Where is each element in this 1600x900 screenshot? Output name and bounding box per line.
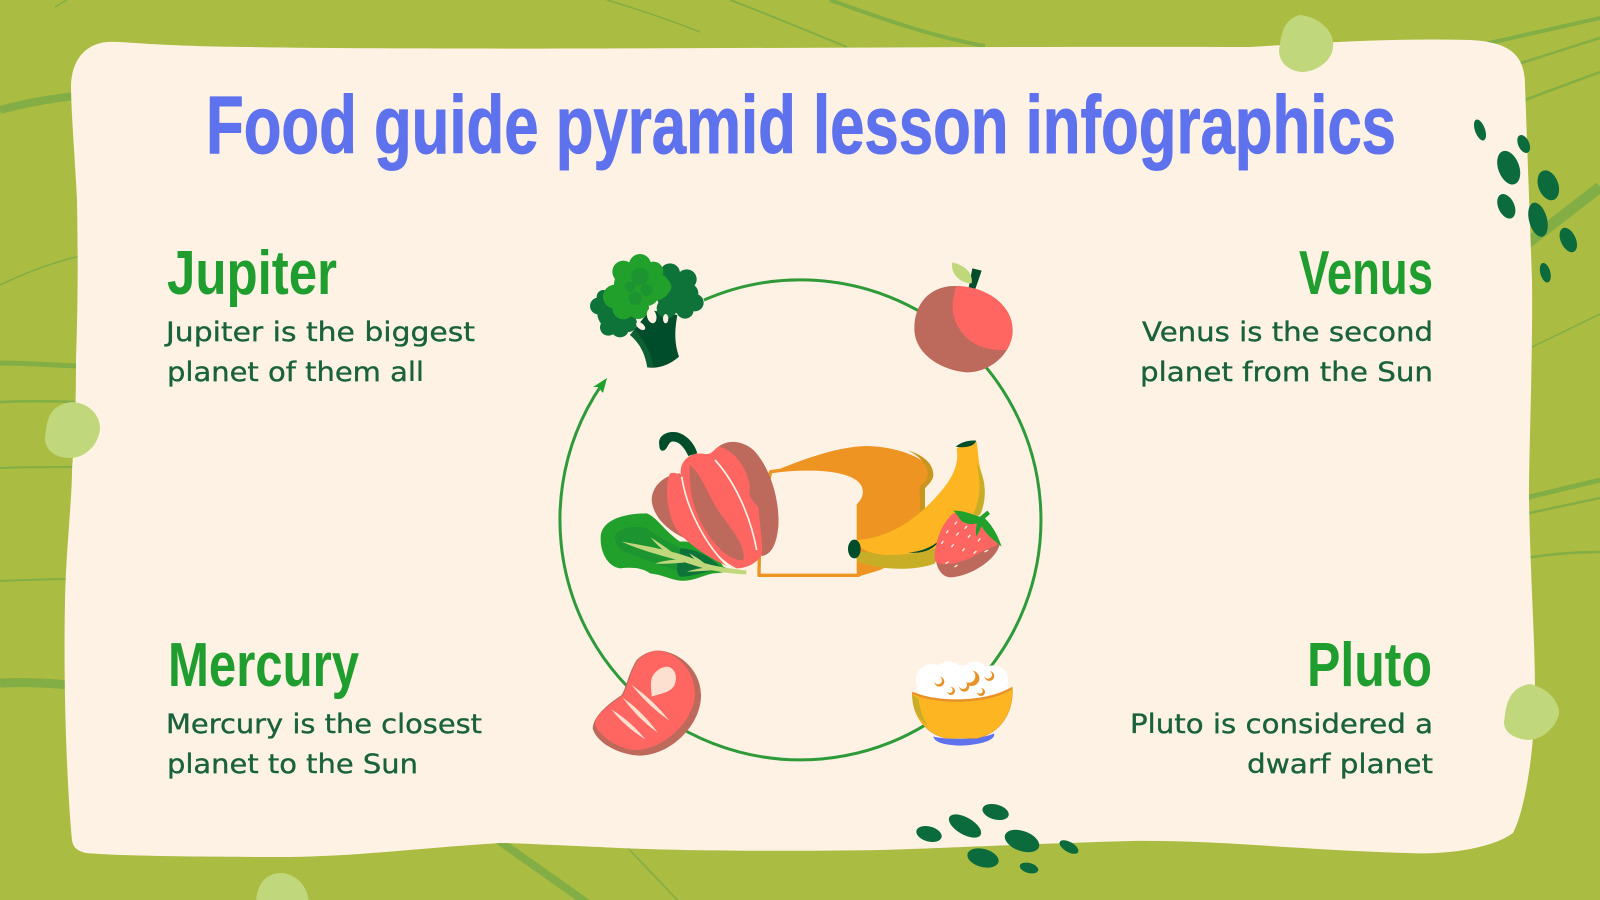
icon: bread (759, 446, 933, 577)
text: Venus description: planet from the Sun (1140, 357, 1433, 388)
heading: Jupiter: Jupiter (167, 239, 337, 308)
leaves: bottom (915, 801, 1081, 875)
heading: Venus: Venus (1299, 239, 1433, 308)
arrow: circular cycle (560, 280, 1041, 760)
icon: broccoli (590, 254, 704, 368)
illustration: central foods (601, 432, 1002, 581)
text: Mercury description: Mercury is the closest (166, 709, 482, 740)
blob: bottom (256, 873, 309, 900)
block: Jupiter (164, 239, 475, 388)
icon: rice bowl (912, 661, 1012, 746)
blob: left (45, 402, 100, 458)
text: Jupiter description: Jupiter is the biggest (164, 317, 475, 348)
text: Jupiter description: planet of them all (167, 357, 424, 388)
icon: bell pepper (652, 432, 779, 568)
icon: strawberry (935, 511, 1002, 577)
block: Mercury (166, 631, 482, 780)
leaves: top right (1472, 118, 1581, 284)
heading: Pluto: Pluto (1307, 631, 1432, 700)
block: Venus (1140, 239, 1433, 388)
text: Pluto description: Pluto is considered a (1130, 709, 1433, 740)
icon: banana (848, 441, 985, 569)
icon: steak (593, 651, 701, 756)
icon: apple (914, 262, 1020, 372)
text: Mercury description: planet to the Sun (167, 749, 418, 780)
icon: leafy green (601, 513, 747, 581)
heading: Mercury: Mercury (168, 631, 359, 700)
blob: top (1279, 15, 1333, 72)
block: Pluto (1130, 631, 1433, 780)
blob: right (1504, 684, 1559, 740)
text: Venus description: Venus is the second (1142, 317, 1433, 348)
text: Pluto description: dwarf planet (1247, 749, 1433, 780)
